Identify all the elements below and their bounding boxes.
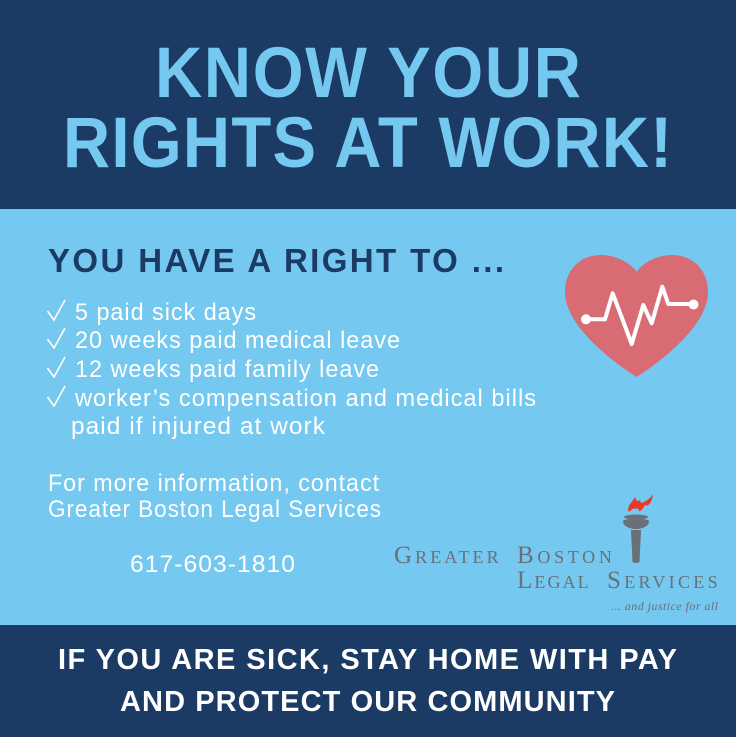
logo text: LEGAL	[517, 567, 591, 594]
panel: rights section	[0, 209, 736, 625]
checklist of rights: worker’s compensation and medical bills	[74, 385, 537, 412]
icon: check mark	[48, 328, 65, 348]
list item continuation: paid if injured at work	[71, 413, 326, 440]
icon: check mark	[48, 300, 65, 320]
icon: torch	[623, 494, 653, 563]
contact text: Greater Boston Legal Services	[48, 496, 382, 523]
heading: you have a right to: YOU HAVE A RIGHT TO ...	[48, 242, 504, 279]
phone number: 617-603-1810	[130, 551, 296, 578]
checklist of rights: 20 weeks paid medical leave	[75, 327, 401, 354]
icon: check mark	[48, 357, 65, 377]
panel: bottom banner	[0, 625, 736, 737]
panel: top banner	[0, 0, 736, 209]
logo text: ... and justice for all	[611, 599, 719, 613]
closing message	[58, 644, 677, 718]
icon: check mark	[48, 386, 65, 406]
closing message: IF YOU ARE SICK, STAY HOME WITH PAY	[58, 644, 677, 676]
logo: Greater Boston Legal Services	[394, 494, 721, 613]
title: RIGHTS AT WORK!	[63, 104, 672, 183]
checklist of rights: 5 paid sick days	[75, 299, 257, 326]
checklist of rights: 12 weeks paid family leave	[75, 356, 380, 383]
logo text: BOSTON	[517, 542, 616, 569]
logo text: GREATER	[394, 542, 502, 569]
icon: heart with heartbeat	[565, 255, 708, 377]
contact text: For more information, contact	[48, 470, 380, 497]
logo text: SERVICES	[607, 567, 721, 594]
title	[63, 34, 672, 183]
contact text	[48, 470, 382, 523]
checklist of rights	[48, 299, 537, 440]
logo text	[394, 542, 721, 613]
closing message: AND PROTECT OUR COMMUNITY	[120, 686, 615, 718]
title: KNOW YOUR	[155, 34, 581, 113]
